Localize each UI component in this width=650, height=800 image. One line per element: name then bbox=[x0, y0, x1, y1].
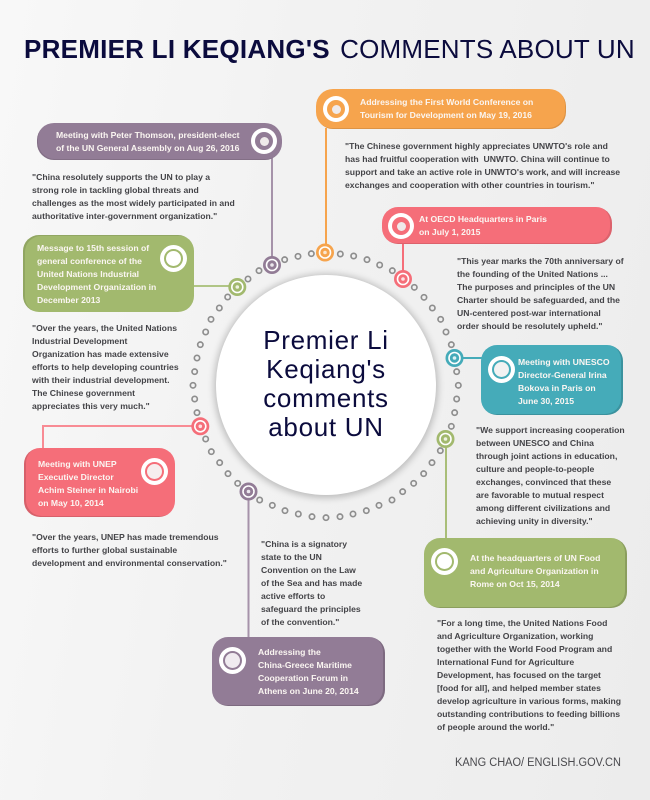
panel text: Addressing the bbox=[258, 647, 321, 657]
panel text: Executive Director bbox=[38, 472, 114, 482]
quote: UNESCO: exchanges, convinced that these bbox=[476, 477, 611, 487]
quote: Tourism: has had fruitful cooperation with UNWTO. China will continue to bbox=[345, 154, 610, 164]
quote: UNEP bbox=[32, 532, 227, 568]
panel text: Director-General Irina bbox=[518, 370, 607, 380]
quote: UNESCO: between UNESCO and China bbox=[476, 438, 594, 448]
panel text: on May 10, 2014 bbox=[38, 498, 104, 508]
panel: UNEP bbox=[24, 448, 175, 517]
title: PREMIER LI KEQIANG'S COMMENTS ABOUT UN bbox=[24, 34, 635, 64]
quote: Tourism: "The Chinese government highly appreciates UNWTO's role and bbox=[345, 141, 608, 151]
panel text: Athens on June 20, 2014 bbox=[258, 686, 359, 696]
panel text: December 2013 bbox=[37, 295, 100, 305]
quote: UNIDO: "Over the years, the United Nations bbox=[32, 323, 177, 333]
quote: FAO: together with the World Food Program and bbox=[437, 644, 612, 654]
panel: First World Conference on Tourism bbox=[316, 89, 566, 129]
quote: UNIDO: Industrial Development bbox=[32, 336, 127, 346]
quote: Peter Thomson bbox=[32, 172, 235, 221]
quote: FAO bbox=[437, 618, 621, 732]
quote: FAO: Development, has focused on the target bbox=[437, 670, 601, 680]
panel text: Achim Steiner in Nairobi bbox=[38, 485, 138, 495]
panel: OECD bbox=[382, 207, 612, 244]
icon: ring bbox=[160, 245, 187, 272]
quote: UNEP: "Over the years, UNEP has made tremendous bbox=[32, 532, 219, 542]
panel text bbox=[37, 243, 156, 305]
panel text: At OECD Headquarters in Paris bbox=[419, 214, 547, 224]
quote: UNESCO: are favorable to mutual respect bbox=[476, 490, 604, 500]
panel text: June 30, 2015 bbox=[518, 396, 574, 406]
quote: OECD: order should be resolutely upheld." bbox=[457, 321, 602, 331]
quote: FAO: of people around the world." bbox=[437, 722, 554, 732]
quote: Peter Thomson: "China resolutely supports the UN to play a bbox=[32, 172, 210, 182]
quote: UNESCO: through joint actions in education, bbox=[476, 451, 617, 461]
icon: ring bbox=[323, 96, 349, 122]
panel: Peter Thomson bbox=[37, 123, 282, 160]
panel text bbox=[38, 459, 138, 508]
node: teal bbox=[446, 349, 464, 367]
node: red left bbox=[191, 417, 209, 435]
icon: ring bbox=[488, 356, 515, 383]
icon: ring bbox=[141, 458, 168, 485]
quote: OECD: the founding of the United Nations ... bbox=[457, 269, 608, 279]
panel text: on July 1, 2015 bbox=[419, 227, 480, 237]
panel text: Meeting with UNEP bbox=[38, 459, 117, 469]
node: green left bbox=[228, 278, 246, 296]
quote: Law of the Sea: "China is a signatory bbox=[261, 539, 347, 549]
icon: ring bbox=[219, 647, 246, 674]
quote: FAO: outstanding contributions to feeding billions bbox=[437, 709, 620, 719]
ring of dots bbox=[190, 251, 461, 520]
quote: Peter Thomson: strong role in tackling global threats and bbox=[32, 185, 199, 195]
quote: UNESCO: "We support increasing cooperation bbox=[476, 425, 625, 435]
panel: China-Greece bbox=[212, 637, 385, 706]
quote: UNESCO: among different civilizations and bbox=[476, 503, 610, 513]
panel text: Addressing the First World Conference on bbox=[360, 97, 533, 107]
quote: UNIDO: Organization has made extensive bbox=[32, 349, 169, 359]
icon: ring bbox=[431, 548, 458, 575]
quote: OECD bbox=[457, 256, 624, 331]
quote: Peter Thomson: authoritative inter-government organization." bbox=[32, 211, 217, 221]
quote: Tourism: exchanges and cooperation with other countries in tourism." bbox=[345, 180, 594, 190]
quote: UNIDO bbox=[32, 323, 179, 411]
node: red top bbox=[394, 270, 412, 288]
panel: UNESCO bbox=[481, 345, 623, 415]
quote: Law of the Sea: state to the UN bbox=[261, 552, 322, 562]
quote: Peter Thomson: challenges as the most widely participated in and bbox=[32, 198, 235, 208]
quote: Law of the Sea: of the Sea and has made bbox=[261, 578, 362, 588]
panel text: and Agriculture Organization in bbox=[470, 566, 599, 576]
quote: UNESCO: culture and people-to-people bbox=[476, 464, 594, 474]
quote: FAO: "For a long time, the United Nations Food bbox=[437, 618, 607, 628]
quote: UNEP: efforts to further global sustainable bbox=[32, 545, 177, 555]
panel text: Rome on Oct 15, 2014 bbox=[470, 579, 560, 589]
quote: Tourism bbox=[345, 141, 620, 190]
quote: UNIDO: efforts to help developing countries bbox=[32, 362, 179, 372]
quote: Law of the Sea: Convention on the Law bbox=[261, 565, 356, 575]
quote: Law of the Sea: active efforts to bbox=[261, 591, 325, 601]
panel text bbox=[360, 97, 533, 120]
quote: Tourism: support and take an active role in UNWTO's work, and will increase bbox=[345, 167, 620, 177]
panel: Message to UNIDO bbox=[23, 235, 194, 312]
connector lines bbox=[43, 128, 483, 638]
quote: OECD: UN-centered post-war international bbox=[457, 308, 601, 318]
icon: ring bbox=[388, 213, 414, 239]
central circle bbox=[216, 275, 436, 495]
panel text: United Nations Industrial bbox=[37, 269, 139, 279]
panel text: general conference of the bbox=[37, 256, 142, 266]
credit: KANG CHAO/ ENGLISH.GOV.CN bbox=[455, 755, 621, 769]
quote: FAO: [food for all], and helped member states bbox=[437, 683, 601, 693]
panel text: China-Greece Maritime bbox=[258, 660, 352, 670]
panel text: Bokova in Paris on bbox=[518, 383, 596, 393]
quote: Law of the Sea bbox=[261, 539, 362, 627]
quote: UNESCO bbox=[476, 425, 625, 526]
node: purple bottom bbox=[240, 482, 258, 500]
quote: UNIDO: The Chinese government bbox=[32, 388, 135, 398]
panel text: Meeting with Peter Thomson, president-elect bbox=[56, 130, 240, 140]
quote: OECD: Charter should be safeguarded, and the bbox=[457, 295, 620, 305]
node: green right bbox=[436, 430, 454, 448]
quote: OECD: "This year marks the 70th anniversary of bbox=[457, 256, 624, 266]
panel text bbox=[470, 553, 600, 589]
panel text: Message to 15th session of bbox=[37, 243, 149, 253]
panel text bbox=[56, 130, 240, 153]
quote: UNESCO: achieving unity in diversity." bbox=[476, 516, 593, 526]
quote: FAO: and Agriculture Organization, working bbox=[437, 631, 593, 641]
central circle: about UN bbox=[268, 412, 384, 442]
central circle: Premier Li bbox=[263, 325, 389, 355]
panel text: Cooperation Forum in bbox=[258, 673, 348, 683]
panel: UN Food and Agriculture Organization bbox=[424, 538, 627, 608]
panel text: Development Organization in bbox=[37, 282, 156, 292]
quote: UNIDO: appreciates this very much." bbox=[32, 401, 150, 411]
panel text: of the UN General Assembly on Aug 26, 2016 bbox=[56, 143, 239, 153]
central circle: comments bbox=[263, 383, 389, 413]
panel text bbox=[518, 357, 610, 406]
panel text bbox=[258, 647, 359, 696]
quote: UNEP: development and environmental conservation." bbox=[32, 558, 227, 568]
quote: FAO: International Fund for Agriculture bbox=[437, 657, 574, 667]
central circle: Keqiang's bbox=[266, 354, 386, 384]
node: purple top bbox=[263, 256, 281, 274]
quote: Law of the Sea: of the convention." bbox=[261, 617, 339, 627]
quote: UNIDO: with their industrial development. bbox=[32, 375, 170, 385]
icon: ring bbox=[251, 128, 277, 154]
node: orange bbox=[316, 244, 334, 262]
panel text: Meeting with UNESCO bbox=[518, 357, 610, 367]
quote: Law of the Sea: safeguard the principles bbox=[261, 604, 361, 614]
panel text: At the headquarters of UN Food bbox=[470, 553, 600, 563]
quote: FAO: develop agriculture in various forms, making bbox=[437, 696, 621, 706]
panel text bbox=[419, 214, 547, 237]
quote: OECD: The purposes and principles of the UN bbox=[457, 282, 615, 292]
panel text: Tourism for Development on May 19, 2016 bbox=[360, 110, 532, 120]
